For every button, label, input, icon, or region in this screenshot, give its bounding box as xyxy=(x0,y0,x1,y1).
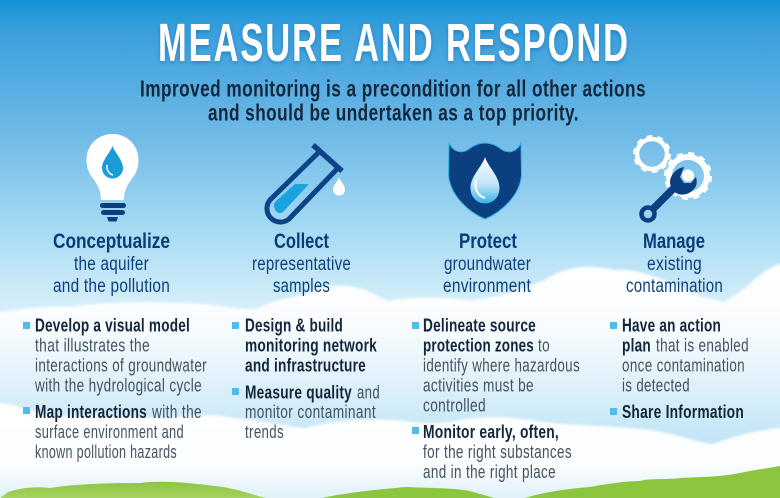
bullet list: Manage xyxy=(610,314,749,422)
bullet list: Collect: and xyxy=(357,382,380,402)
column heading: Manage: contamination xyxy=(626,276,723,297)
bullet list: Collect: Measure quality xyxy=(245,382,352,402)
subtitle: and should be undertaken as a top priority. xyxy=(208,100,579,126)
bullet list: Manage: Have an action xyxy=(622,314,721,336)
bullet list: Conceptualize: interactions of groundwater xyxy=(35,354,207,376)
bullet list: Protect: activities must be xyxy=(423,374,534,396)
bullet list: Protect: and in the right place xyxy=(423,461,556,482)
clouds: lower layer xyxy=(0,402,780,498)
bullet list: Conceptualize: that illustrates the xyxy=(35,334,150,356)
column heading: Collect xyxy=(252,229,351,297)
bullet list: Collect: and infrastructure xyxy=(245,354,366,376)
subtitle xyxy=(140,76,646,126)
column heading: Protect: environment xyxy=(443,276,531,297)
bullet list: Protect: Monitor early, often, xyxy=(423,421,559,442)
icon: test tube with drop xyxy=(267,145,345,222)
bullet list: Protect: protection zones xyxy=(423,334,534,356)
gear: small xyxy=(635,137,669,171)
column heading: Conceptualize: Conceptualize xyxy=(53,229,170,253)
gear: large xyxy=(666,154,710,198)
wrench xyxy=(642,167,697,220)
hill: centre xyxy=(322,487,494,498)
bullet list: Conceptualize: Develop a visual model xyxy=(35,314,190,336)
bullet list: Collect: trends xyxy=(245,421,284,442)
bullet list: Conceptualize: surface environment and xyxy=(35,421,184,442)
hill: left xyxy=(0,482,266,498)
bullet list: Conceptualize: with the hydrological cycle xyxy=(34,374,202,396)
column heading: Manage: existing xyxy=(647,254,702,275)
bullet list: Conceptualize: Map interactions xyxy=(35,401,147,422)
bullet list: Protect: for the right substances xyxy=(423,441,572,462)
bullet list: Collect xyxy=(232,314,380,442)
bullet list: Protect: to xyxy=(538,334,550,356)
bullet list: Collect: monitoring network xyxy=(245,334,377,356)
bullet list: Protect: Delineate source xyxy=(423,314,536,336)
column heading: Conceptualize: the aquifer xyxy=(74,254,149,275)
bullet list: Conceptualize: with the xyxy=(151,401,202,422)
bullet list: Conceptualize xyxy=(23,314,207,462)
column heading: Collect: samples xyxy=(273,276,330,297)
bullet list: Protect: controlled xyxy=(423,394,486,416)
bullet list: Protect xyxy=(412,314,580,482)
bullet list: Collect: monitor contaminant xyxy=(245,401,376,422)
hill: right xyxy=(525,466,780,498)
column heading: Conceptualize: and the pollution xyxy=(53,276,170,297)
icon: light bulb with water drop xyxy=(86,134,138,222)
column heading: Protect: Protect xyxy=(459,229,517,253)
bullet list: Protect: identify where hazardous xyxy=(423,354,580,376)
sky background xyxy=(0,0,780,340)
bullet list: Collect: Design & build xyxy=(245,314,343,336)
column heading: Protect xyxy=(443,229,531,297)
column heading: Collect: Collect xyxy=(274,229,329,253)
column heading: Conceptualize xyxy=(53,229,170,297)
column heading: Manage: Manage xyxy=(643,229,705,253)
clouds: upper layer xyxy=(0,262,780,450)
bullet list: Manage: is detected xyxy=(622,374,690,396)
column heading: Protect: groundwater xyxy=(444,254,531,275)
green hills xyxy=(0,466,780,498)
column heading: Collect: representative xyxy=(252,254,351,275)
column heading: Manage xyxy=(626,229,723,297)
icon: shield with water drop xyxy=(448,142,522,219)
bullet list: Manage: plan xyxy=(622,334,651,356)
icon: gears and wrench xyxy=(635,137,710,220)
bullet list: Conceptualize: known pollution hazards xyxy=(35,441,177,462)
